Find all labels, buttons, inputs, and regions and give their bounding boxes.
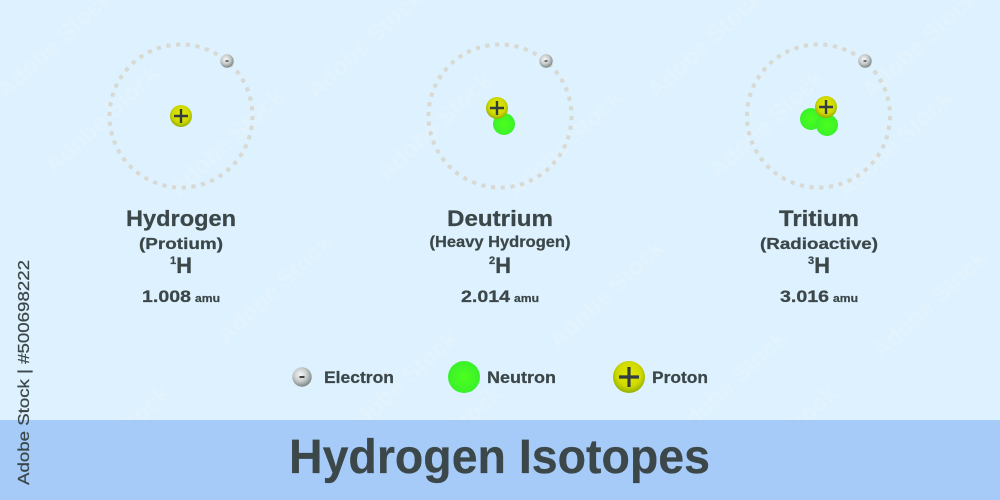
label: tritium: amu xyxy=(833,293,858,305)
watermark pattern: Adobe Stock xyxy=(164,82,290,202)
label: hydrogen: H xyxy=(176,253,192,278)
label: deuterium: amu xyxy=(514,293,539,305)
atom: deuterium xyxy=(428,44,572,188)
watermark pattern: Adobe Stock xyxy=(667,324,793,444)
watermark pattern: Adobe Stock xyxy=(372,66,498,186)
stock credit: Adobe Stock | #500698222 xyxy=(16,260,33,485)
watermark pattern: Adobe Stock xyxy=(337,324,463,444)
atom: hydrogen xyxy=(110,44,252,188)
label: hydrogen: 1.008 xyxy=(142,287,191,306)
label: hydrogen: 1 xyxy=(170,255,176,267)
watermark pattern: Adobe Stock xyxy=(382,379,508,499)
title: Hydrogen Isotopes xyxy=(289,431,710,484)
label: hydrogen: Hydrogen xyxy=(126,206,236,231)
legend: neutron xyxy=(448,361,556,393)
watermark pattern: Adobe Stock xyxy=(704,64,830,184)
label: deuterium: H xyxy=(495,253,511,278)
label: deuterium: Deutrium xyxy=(447,206,553,231)
atom: tritium xyxy=(747,44,890,188)
watermark pattern: Adobe Stock xyxy=(40,59,166,179)
label: tritium: H xyxy=(814,253,830,278)
legend: electron: Electron xyxy=(324,368,394,387)
label: tritium xyxy=(760,206,878,306)
label: tritium: (Radioactive) xyxy=(760,236,878,253)
label: hydrogen: (Protium) xyxy=(139,236,223,253)
watermark pattern: Adobe Stock xyxy=(867,244,993,364)
watermark pattern: Adobe Stock xyxy=(212,229,338,349)
watermark pattern: Adobe Stock xyxy=(832,84,958,204)
label: tritium: 3.016 xyxy=(780,287,829,306)
legend xyxy=(292,361,708,393)
watermark pattern: Adobe Stock xyxy=(717,379,843,499)
watermark pattern: Adobe Stock xyxy=(50,379,176,499)
legend: proton xyxy=(613,361,708,393)
label: hydrogen xyxy=(126,206,236,306)
label: deuterium xyxy=(430,206,570,306)
watermark pattern: Adobe Stock xyxy=(544,234,670,354)
label: tritium: Tritium xyxy=(779,206,859,231)
label: tritium: 3 xyxy=(808,255,814,267)
title band xyxy=(0,420,1000,500)
label: deuterium: 2 xyxy=(489,255,495,267)
watermark pattern: Adobe Stock xyxy=(502,84,628,204)
legend: neutron: Neutron xyxy=(487,368,556,387)
legend: electron xyxy=(292,367,394,387)
label: hydrogen: amu xyxy=(195,293,220,305)
label: deuterium: 2.014 xyxy=(461,287,511,306)
legend: proton: Proton xyxy=(652,368,708,387)
label: deuterium: (Heavy Hydrogen) xyxy=(430,234,570,251)
